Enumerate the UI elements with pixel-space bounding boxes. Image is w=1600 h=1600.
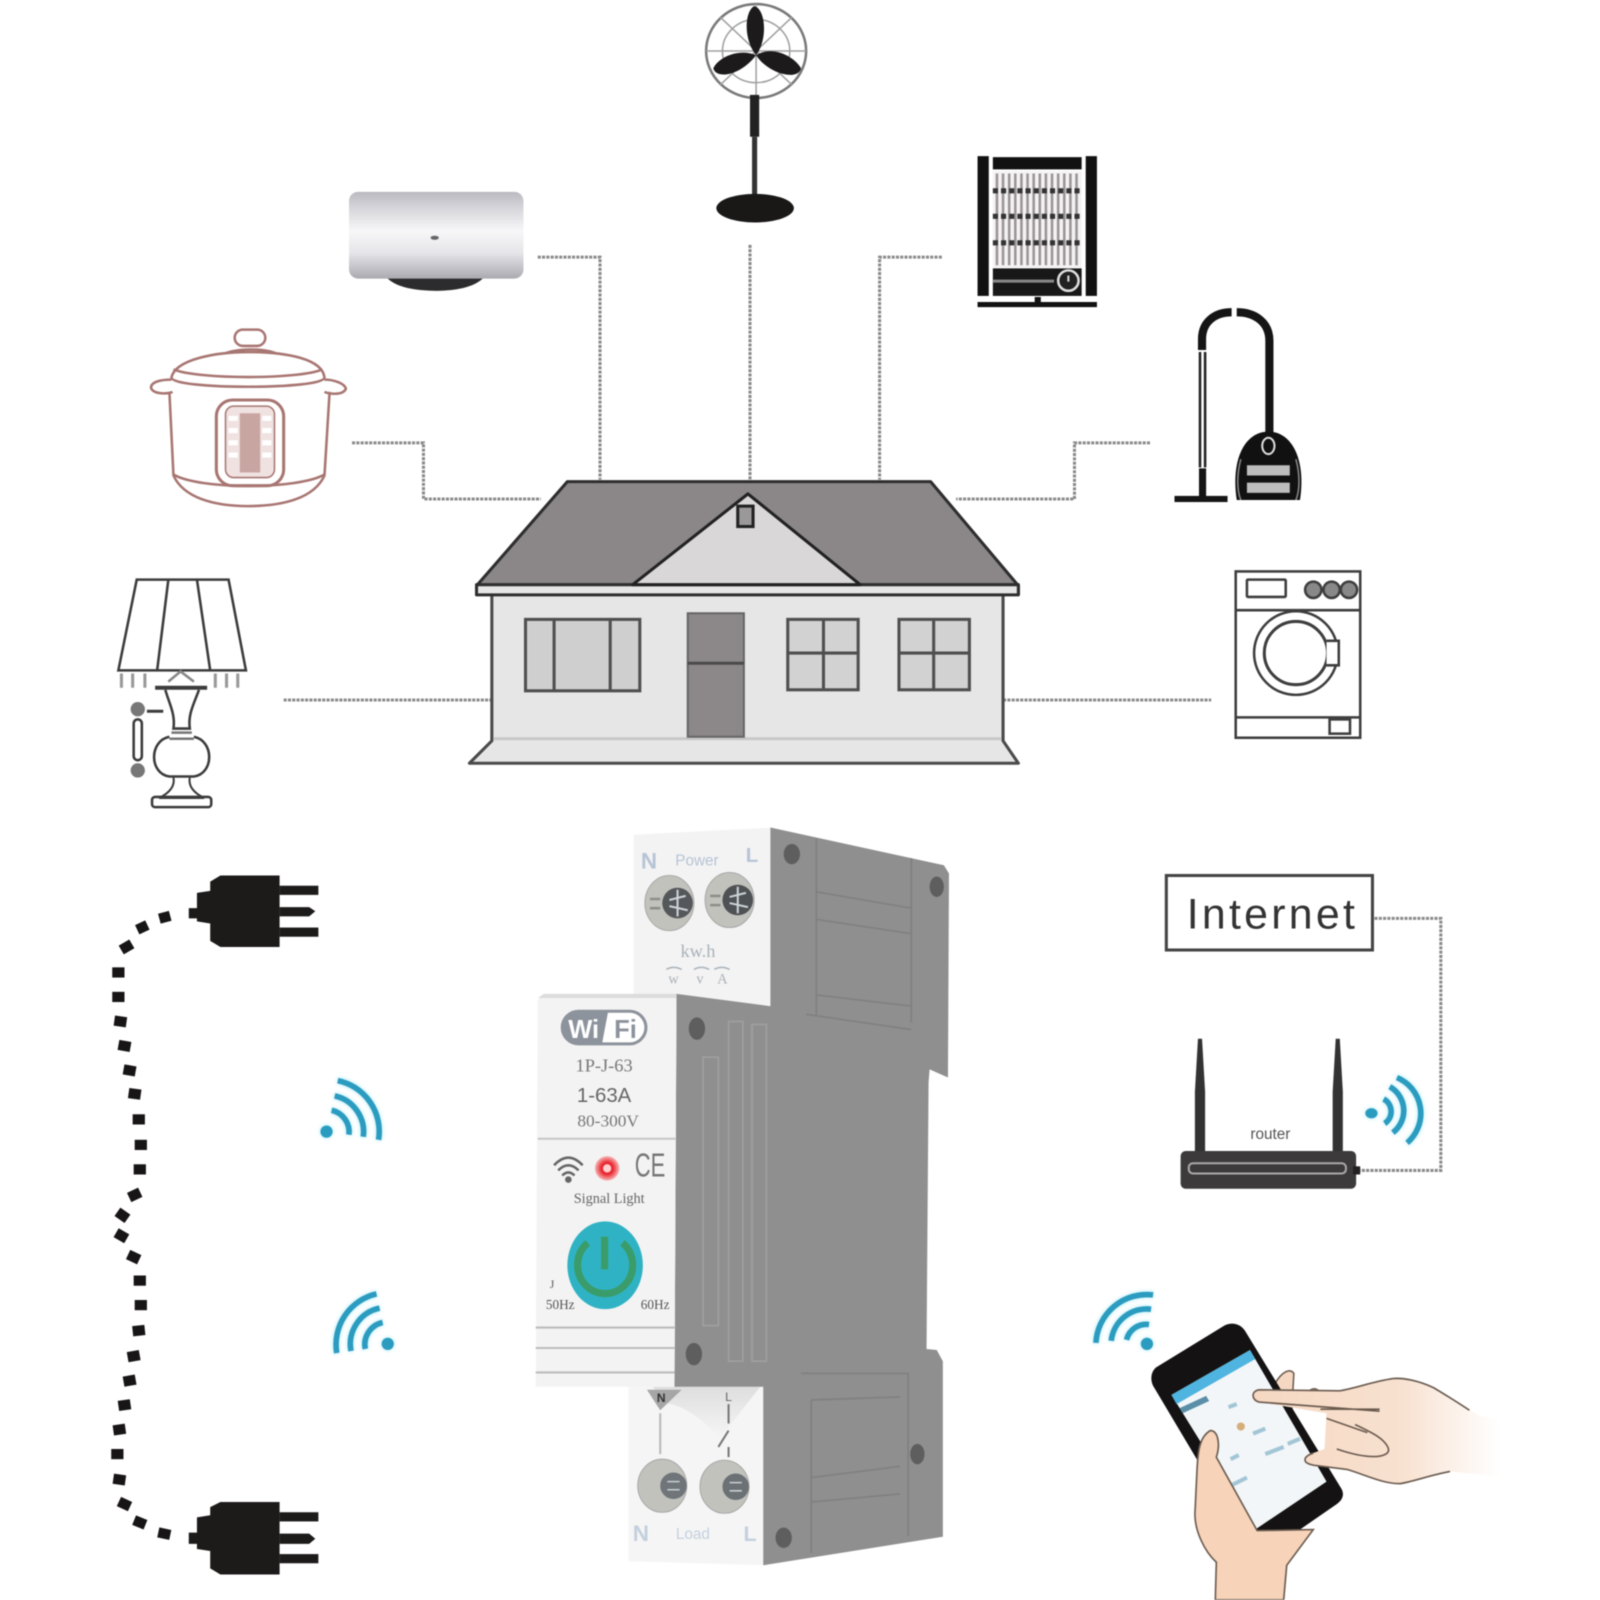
- icon: router: router: [1250, 1126, 1290, 1143]
- bottom left screw: [638, 1459, 687, 1512]
- house roof: [477, 482, 1018, 594]
- door: [688, 613, 744, 737]
- icon: wifi signal left lower: [336, 1294, 393, 1353]
- right window two: [899, 619, 969, 690]
- phone body: [1151, 1324, 1343, 1553]
- illustration: breaker device: [536, 828, 949, 1565]
- red signal LED: [595, 1156, 619, 1181]
- icon: wifi signal by phone: [1096, 1295, 1153, 1349]
- bottom terminal block: L: [725, 1390, 732, 1404]
- icon: bottom power plug: [189, 1502, 318, 1574]
- illustration: hands holding smartphone: [1151, 1324, 1500, 1600]
- internet box: [1166, 876, 1372, 950]
- white front panel: 80-300V: [577, 1112, 639, 1131]
- house walls: [469, 594, 1018, 763]
- phone screen: [1171, 1350, 1327, 1530]
- wifi badge: Wi: [568, 1016, 599, 1044]
- grey housing: [674, 828, 949, 1565]
- top left screw: [645, 876, 694, 931]
- icon: standing fan: [706, 4, 806, 222]
- dotted connection lines from appliances to house: [284, 245, 1211, 700]
- top terminal block: L: [746, 845, 758, 867]
- white front panel: CE: [635, 1148, 665, 1185]
- icon: rice cooker: [151, 330, 346, 506]
- white front panel: [536, 994, 677, 1387]
- wifi badge: [562, 1011, 646, 1044]
- wifi badge: Fi: [614, 1016, 637, 1044]
- icon: wifi signal by router: [1366, 1078, 1421, 1143]
- bottom right screw: [700, 1460, 749, 1513]
- top terminal block: N: [641, 848, 657, 873]
- top terminal block: Power: [675, 852, 719, 869]
- power button: [567, 1221, 643, 1309]
- top terminal block: v: [696, 972, 704, 988]
- gable with attic vent: [633, 494, 860, 585]
- holding hand: [1195, 1431, 1313, 1600]
- bottom terminal block: Load: [676, 1526, 710, 1543]
- wide window: [526, 619, 640, 691]
- icon: small wifi symbol: [554, 1158, 583, 1182]
- illustration: house: [469, 482, 1018, 763]
- white front panel: Signal Light: [574, 1191, 645, 1207]
- top terminal block: kw.h: [680, 941, 715, 961]
- icon: top power plug: [189, 876, 318, 947]
- bottom terminal block: L: [743, 1522, 757, 1546]
- white front panel: 60Hz: [641, 1297, 670, 1312]
- white front panel: 1P-J-63: [576, 1055, 633, 1075]
- icon: space heater: [978, 156, 1097, 307]
- white front panel: 1-63A: [577, 1085, 632, 1107]
- top terminal block: A: [717, 972, 728, 988]
- icon: table lamp: [118, 580, 246, 807]
- dashed power cable: [111, 911, 172, 1540]
- pointing hand: [1253, 1378, 1500, 1484]
- icon: washing machine: [1236, 571, 1360, 738]
- white front panel: 50Hz: [546, 1297, 575, 1312]
- icon: router: [1181, 1039, 1360, 1189]
- icon: vacuum cleaner: [1174, 312, 1301, 502]
- icon: wifi signal left upper: [321, 1081, 379, 1140]
- icon: water heater: [349, 192, 523, 291]
- dotted line from internet to router: [1353, 918, 1441, 1170]
- fingers behind phone: [1276, 1371, 1320, 1408]
- internet box: Internet: [1187, 891, 1358, 939]
- right window one: [788, 619, 858, 690]
- top terminal block: [634, 828, 773, 1005]
- bottom terminal block: [629, 1383, 767, 1565]
- bottom terminal block: N: [657, 1391, 666, 1405]
- white front panel: J: [550, 1279, 555, 1291]
- top right screw: [705, 872, 754, 928]
- bottom terminal block: N: [633, 1521, 649, 1546]
- top terminal block: w: [668, 972, 679, 988]
